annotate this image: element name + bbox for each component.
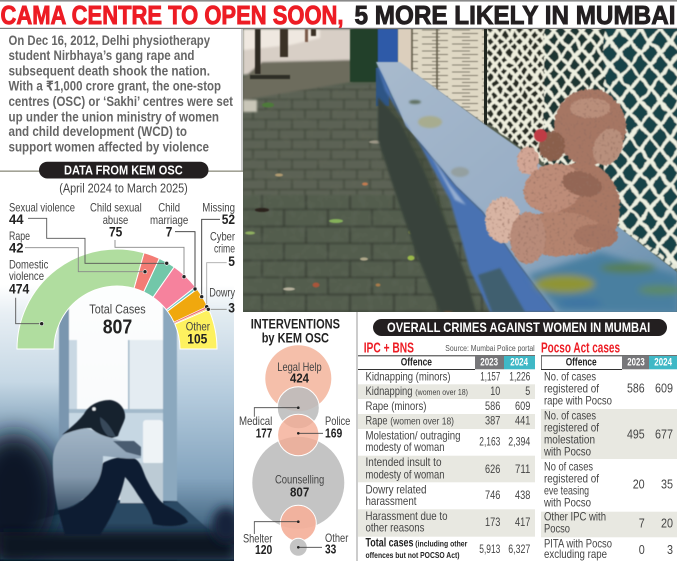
bubble labels: Counselling [275,472,324,486]
donut labels: Child sexual [90,201,142,215]
bubble labels: Police [325,414,351,428]
donut labels: Child [158,201,180,215]
2023 values: 2,163 [479,435,501,449]
row labels: (women over 18) [415,387,468,397]
table header: 2024 [510,357,529,369]
donut leader lines [16,218,227,326]
fence: near mesh [485,25,685,280]
2024 values [655,380,673,557]
intro text block [8,33,233,154]
ledge top [376,62,677,312]
intro text block: With a ₹1,000 crore grant, the one-stop [8,79,221,94]
donut labels: 42 [9,240,24,256]
leaves on path [245,92,453,312]
2024 values [508,369,531,556]
2023 values: 1,157 [480,369,501,383]
interventions heading [251,316,340,346]
hedge and blue post [350,29,398,106]
row labels: Kidnapping [366,384,412,398]
bubble labels: 169 [325,425,342,440]
row labels: excluding rape [544,547,607,561]
photo: teddy bear by a fence [243,25,685,312]
2024 values: 438 [515,488,531,502]
bubble labels: Shelter [243,531,272,545]
table header: 2023 [480,357,498,369]
semi-donut chart [17,249,217,349]
table header: Offence [401,357,432,369]
row labels [366,369,468,560]
2024 values: 35 [661,476,673,491]
source note: Source: Mumbai Police portal [445,343,535,353]
2023 values: 626 [485,462,501,476]
section rule with heading pill: DATA FROM KEM OSC [64,163,183,177]
donut labels: Cyber [210,230,235,244]
row labels: registered of [544,382,600,396]
intro text block: up under the union ministry of women [8,110,219,124]
row labels [543,370,612,561]
intro text block: subsequent death shook the nation. [8,63,210,78]
2023 values: 5,913 [479,542,501,556]
2024 values: 677 [655,426,673,441]
donut labels: 807 [103,316,132,338]
dark shadow on wall [0,433,56,557]
row shading [358,384,535,537]
row labels: No. of cases [544,370,596,384]
row labels: Rape (minors) [366,399,426,413]
table header: 2024 [654,357,673,369]
2023 values: 20 [633,476,645,491]
table header [541,355,677,370]
row labels: offences but not POCSO Act) [366,550,460,560]
far pavement [243,29,444,214]
intro text block: student Nirbhaya’s gang rape and [8,48,194,63]
table: Pocso Act cases [541,339,677,561]
donut labels: Domestic [9,257,48,271]
headline: CAMA CENTRE TO OPEN SOON, [0,0,344,30]
2023 values: 586 [627,380,645,395]
row labels: Molestation/ outraging [366,428,460,442]
2024 values: 6,327 [508,542,531,556]
row labels: registered of [544,472,600,486]
row labels: other reasons [366,521,424,535]
donut labels: Missing [202,201,235,215]
2024 values: 20 [661,515,673,530]
intro text block: On Dec 16, 2012, Delhi physiotherapy [8,33,210,48]
intro text block: centres (OSC) or ‘Sakhi’ centres were set [8,94,233,109]
table title: IPC + BNS [364,339,414,356]
bubble labels: Legal Help [277,360,322,374]
row labels: rape with Pocso [544,393,612,407]
intro text block: and child development (WCD) to [8,124,187,139]
row labels: Pocso [544,522,570,536]
woman [53,400,188,535]
2024 values: 711 [515,462,531,476]
2023 values: 387 [485,413,501,427]
table title: Pocso Act cases [541,339,620,356]
donut labels [9,201,235,346]
donut labels: 474 [9,280,29,296]
bubble chart [252,345,344,556]
2024 values: 1,226 [509,369,531,383]
row labels: eve teasing [544,483,589,497]
row labels: with Pocso [543,496,591,510]
section rule with heading pill [0,162,243,178]
2023 values: 495 [627,426,645,441]
intro text block: support women affected by violence [8,140,209,154]
donut labels: crime [214,242,235,256]
doorway [0,285,234,561]
donut labels: 5 [228,253,235,269]
donut labels: 105 [187,330,207,346]
row labels: No of cases [544,460,593,474]
2023 values [479,369,501,556]
teddy bear [485,89,629,264]
brick path [243,85,493,312]
moss [528,252,682,312]
row labels: with Pocso [543,445,591,459]
donut labels: 44 [9,211,24,227]
photo: woman sitting by doorway [0,285,240,561]
ledge side [378,97,476,312]
teddy nose [534,129,547,142]
2023 values: 173 [485,515,501,529]
bubble labels: 120 [255,542,272,557]
headline [0,0,677,30]
2024 values: 3 [667,542,673,557]
fence: far section [398,29,485,124]
2023 values: 746 [485,488,501,502]
2023 values: 586 [485,399,501,413]
donut labels: Total Cases [89,301,146,316]
donut labels: Dowry [209,286,235,300]
donut labels: abuse [103,213,129,227]
2024 values: 441 [515,413,531,427]
donut labels: Rape [9,229,30,243]
row labels: Kidnapping (minors) [366,369,450,383]
divider before crime tables [356,312,358,561]
row labels: (women over 18) [390,415,454,427]
row labels: harassment [366,494,417,508]
2024 values: 2,394 [508,435,531,449]
row labels: Harassment due to [366,509,448,523]
ledge weathering [409,100,525,312]
bubble labels: 33 [325,541,336,556]
row labels: Dowry related [366,482,426,496]
2024 values: 5 [525,384,531,398]
table header [358,355,535,370]
row labels: modesty of woman [366,467,444,481]
fence post [484,29,487,125]
bubble labels: Other [325,531,348,545]
2023 values: 10 [490,384,501,398]
donut labels: marriage [150,213,189,227]
tree trunks [250,29,316,79]
row labels: (including other [415,539,468,549]
vertical rule beside intro [242,28,243,171]
donut labels: 75 [109,224,122,240]
donut labels: Sexual violence [9,201,75,215]
row labels: modesty of woman [366,440,444,454]
row labels: Intended insult to [366,455,442,469]
2024 values: 417 [515,515,531,529]
2023 values: 0 [639,542,645,557]
row labels: Other IPC with [544,510,606,524]
rule under headline [0,28,677,29]
bubble labels: 424 [290,371,310,386]
row labels: No. of cases [544,408,596,422]
table header: Offence [566,357,597,369]
bubble labels [239,360,351,557]
row labels: Rape [366,413,388,427]
interventions heading: INTERVENTIONS [251,316,340,331]
2024 values: 609 [655,380,673,395]
donut labels: 52 [222,211,235,227]
table: IPC + BNS [358,339,535,560]
donut labels: 7 [166,224,172,240]
bubble labels: 807 [290,485,309,500]
table header: 2023 [627,357,645,369]
2023 values: 7 [639,515,645,530]
bubble labels: 177 [256,425,272,440]
2023 values [627,380,645,557]
date range subtitle: (April 2024 to March 2025) [59,182,188,196]
row labels: PITA with Pocso [544,537,612,551]
row labels: molestation [544,432,595,446]
donut labels: 3 [228,300,235,316]
interventions panel [239,316,351,557]
interventions heading: by KEM OSC [262,331,329,346]
row shading [541,409,677,537]
row labels: registered of [544,421,600,435]
bubble leader lines [254,406,323,549]
row labels: Total cases [366,536,414,550]
bubble labels: Medical [239,414,272,428]
2024 values: 609 [515,399,531,413]
ledge front face [376,62,555,312]
donut labels: Other [186,319,210,333]
donut labels: violence [9,269,44,283]
